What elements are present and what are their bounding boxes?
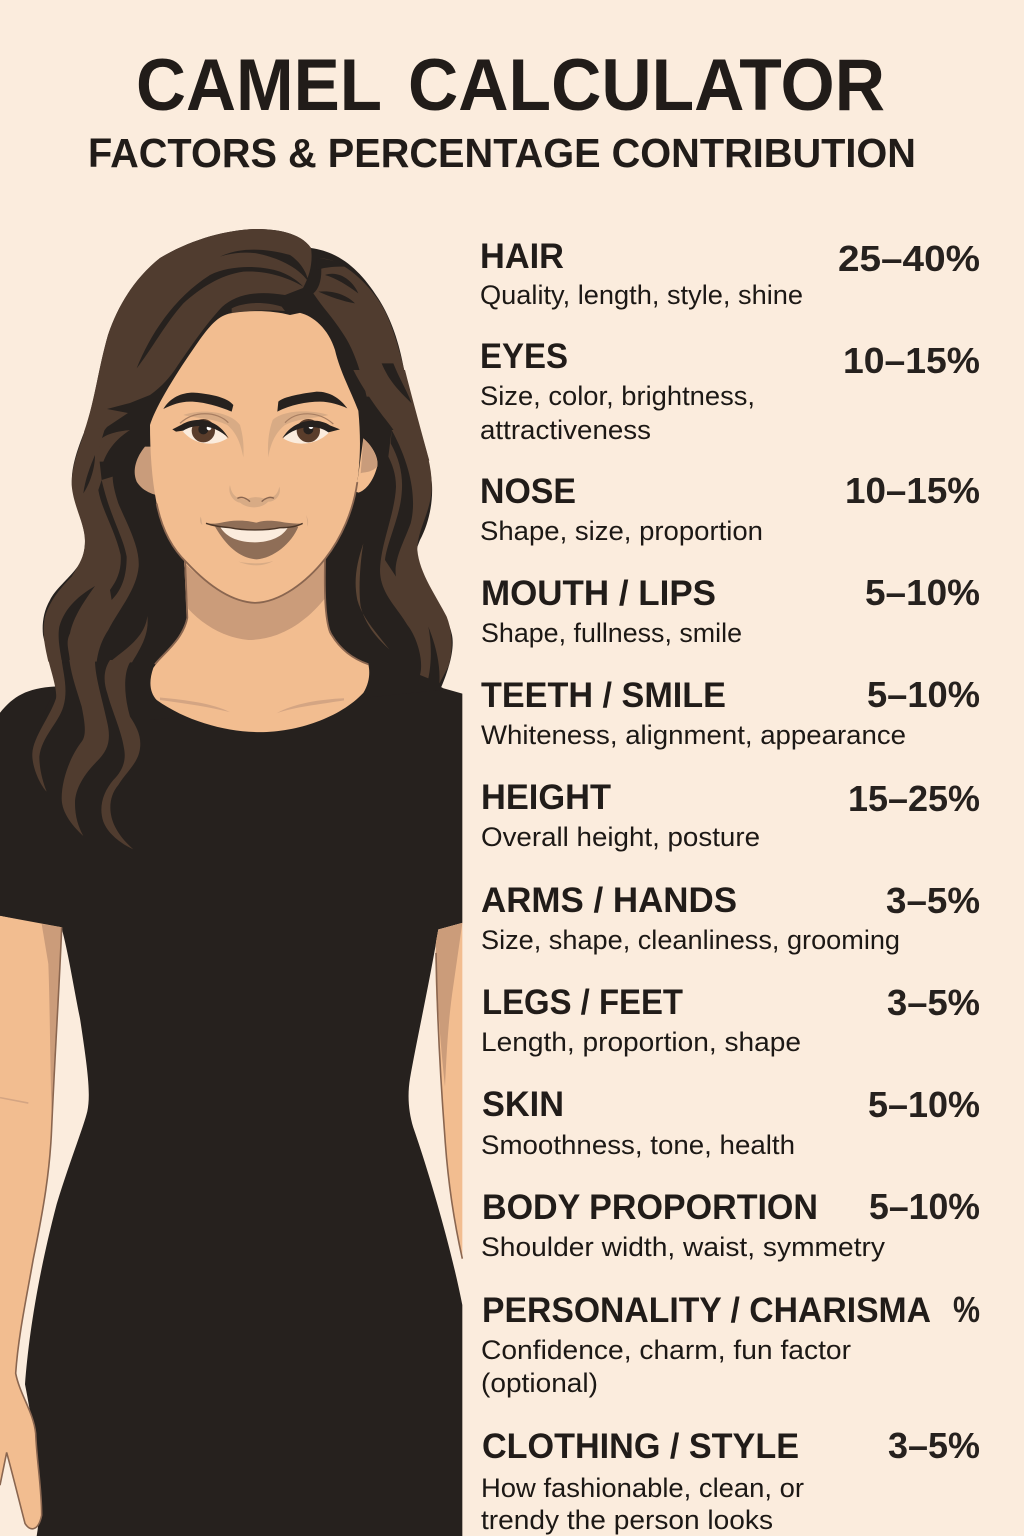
factor: body proportion: BODY PROPORTION bbox=[482, 1188, 818, 1227]
dress bbox=[0, 647, 462, 1536]
factor: eyes: EYES bbox=[480, 337, 568, 376]
factor: personality and charisma: % bbox=[953, 1289, 980, 1330]
factor: body proportion: Shoulder width, waist, symmetry bbox=[481, 1232, 886, 1262]
factor: nose: 10–15% bbox=[845, 470, 980, 511]
hair: right waves bbox=[356, 430, 452, 683]
hair: crown streaks bbox=[137, 250, 308, 368]
right eyebrow bbox=[277, 392, 347, 412]
hair: lower lobes over dress bbox=[32, 660, 140, 849]
nose bbox=[229, 485, 280, 507]
neck and chest bbox=[150, 557, 369, 732]
factor: mouth and lips bbox=[481, 572, 980, 648]
factor: skin: 5–10% bbox=[868, 1084, 980, 1125]
factor: legs and feet: 3–5% bbox=[887, 982, 980, 1023]
factor: hair bbox=[480, 237, 980, 310]
factor: legs and feet: Length, proportion, shape bbox=[481, 1027, 801, 1057]
factor: eyes bbox=[480, 337, 980, 445]
factor: personality and charisma: (optional) bbox=[481, 1368, 598, 1398]
factor: clothing and style: How fashionable, clean, or bbox=[481, 1473, 804, 1503]
right eye bbox=[282, 414, 340, 444]
right arm bbox=[435, 923, 462, 1259]
factor: personality and charisma bbox=[481, 1289, 980, 1398]
factor: legs and feet: LEGS / FEET bbox=[482, 983, 683, 1022]
mouth bbox=[200, 515, 308, 565]
facial features bbox=[163, 392, 347, 565]
left arm and hand bbox=[0, 916, 62, 1529]
factor: teeth and smile bbox=[481, 674, 980, 750]
factor: arms and hands: 3–5% bbox=[886, 880, 980, 921]
factor: eyes: Size, color, brightness, bbox=[480, 381, 755, 411]
factor: hair: Quality, length, style, shine bbox=[480, 280, 803, 310]
factor: clothing and style: 3–5% bbox=[888, 1425, 980, 1466]
factor: skin: SKIN bbox=[482, 1085, 564, 1124]
factor: skin bbox=[481, 1084, 980, 1160]
hair: left mid strand bbox=[93, 430, 130, 462]
factor: height: Overall height, posture bbox=[481, 822, 760, 852]
hair: dark silhouette bbox=[40, 229, 453, 720]
factor: clothing and style bbox=[481, 1425, 980, 1535]
factor: body proportion: 5–10% bbox=[869, 1186, 980, 1227]
factor: clothing and style: CLOTHING / STYLE bbox=[482, 1427, 799, 1466]
hair: brown right crown bbox=[313, 258, 411, 397]
factor: eyes: attractiveness bbox=[480, 415, 651, 445]
left ear bbox=[135, 447, 156, 495]
title bbox=[136, 45, 885, 126]
factor: mouth and lips: 5–10% bbox=[865, 572, 980, 613]
factor: arms and hands: Size, shape, cleanliness, grooming bbox=[481, 925, 900, 955]
subtitle: FACTORS & PERCENTAGE CONTRIBUTION bbox=[88, 130, 916, 176]
factor: mouth and lips: Shape, fullness, smile bbox=[481, 618, 742, 648]
illustration: woman in black dress bbox=[0, 229, 462, 1536]
hair: right mid section bbox=[353, 363, 429, 461]
face bbox=[150, 311, 360, 603]
factor: hair: HAIR bbox=[480, 237, 564, 276]
factor: teeth and smile: TEETH / SMILE bbox=[481, 676, 726, 715]
factor: nose: NOSE bbox=[480, 472, 576, 511]
factor: hair: 25–40% bbox=[838, 238, 980, 279]
left eyebrow bbox=[163, 393, 233, 412]
hair: left waves bbox=[44, 428, 148, 662]
title: CAMEL bbox=[136, 45, 382, 126]
factor: mouth and lips: MOUTH / LIPS bbox=[481, 574, 716, 613]
factor: legs and feet bbox=[481, 982, 980, 1057]
left eye bbox=[172, 414, 229, 444]
factor: body proportion bbox=[481, 1186, 980, 1262]
factor: arms and hands: ARMS / HANDS bbox=[481, 881, 737, 920]
factor: nose: Shape, size, proportion bbox=[480, 516, 763, 546]
factor: height: HEIGHT bbox=[481, 778, 611, 817]
factor: personality and charisma: PERSONALITY / CHARISMA bbox=[482, 1291, 931, 1330]
factor: clothing and style: trendy the person looks bbox=[481, 1505, 773, 1535]
factor: personality and charisma: Confidence, charm, fun factor bbox=[481, 1335, 851, 1365]
right ear bbox=[356, 438, 378, 493]
factor: eyes: 10–15% bbox=[843, 340, 980, 381]
eye socket shading bbox=[183, 412, 244, 457]
factor: height bbox=[481, 778, 980, 852]
factor: skin: Smoothness, tone, health bbox=[481, 1130, 795, 1160]
factor: teeth and smile: 5–10% bbox=[867, 674, 980, 715]
title: CALCULATOR bbox=[408, 45, 885, 126]
factor: height: 15–25% bbox=[848, 778, 980, 819]
hair: brown crown bbox=[84, 229, 312, 462]
factor: arms and hands bbox=[481, 880, 980, 955]
factor: teeth and smile: Whiteness, alignment, appearance bbox=[481, 720, 906, 750]
factor: nose bbox=[480, 470, 980, 546]
